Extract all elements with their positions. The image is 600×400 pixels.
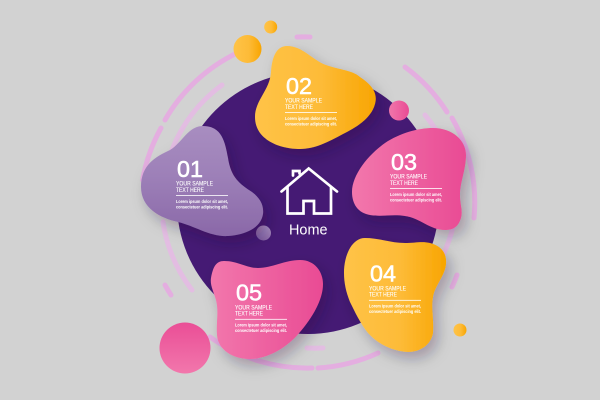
inner dashed ring — [163, 85, 453, 348]
text 04: 04 — [370, 261, 396, 287]
decorative circle: small orange right — [454, 324, 466, 336]
text 01 — [176, 156, 228, 210]
text 05: Lorem ipsum dolor sit amet, — [235, 323, 287, 328]
panel 03 — [352, 128, 466, 230]
decorative circle: large orange — [234, 35, 262, 63]
text 05 — [235, 280, 287, 333]
panel 05 — [211, 260, 323, 359]
decorative circle: small purple — [256, 226, 271, 240]
text 05: 05 — [236, 280, 262, 306]
text 01: consectetuer adipiscing elit. — [176, 204, 228, 210]
text 04: Lorem ipsum dolor sit amet, — [369, 304, 421, 309]
text 02: consectetuer adipiscing elit. — [285, 122, 337, 126]
text 01: Lorem ipsum dolor sit amet, — [176, 199, 228, 204]
text 04: consectetuer adipiscing elit. — [369, 309, 421, 314]
text 02 — [285, 73, 337, 126]
text 03 — [390, 149, 442, 202]
text 05: consectetuer adipiscing elit. — [235, 328, 287, 333]
label: Home: Home — [289, 223, 328, 239]
outer dashed ring — [143, 37, 475, 368]
decorative circle: pink — [389, 100, 409, 120]
panel 04 — [344, 238, 446, 352]
text 04 — [369, 261, 421, 314]
text 02: TEXT HERE — [285, 105, 313, 111]
panel 02 — [255, 46, 376, 149]
icon: house — [282, 168, 337, 214]
text 04: YOUR SAMPLE — [369, 286, 406, 292]
text 03: 03 — [391, 149, 417, 175]
text 02: Lorem ipsum dolor sit amet, — [285, 116, 337, 121]
text 05: TEXT HERE — [235, 312, 263, 318]
text 02: 02 — [286, 73, 312, 99]
text 03: Lorem ipsum dolor sit amet, — [390, 192, 442, 197]
text 03: consectetuer adipiscing elit. — [390, 198, 442, 202]
text 03: TEXT HERE — [390, 181, 418, 187]
text 01: 01 — [177, 156, 203, 182]
text 04: TEXT HERE — [369, 293, 397, 299]
decorative circle: small orange top — [264, 20, 277, 34]
text 01: TEXT HERE — [176, 188, 204, 194]
panel 01 — [141, 126, 263, 236]
decorative circle: large pink — [160, 322, 210, 374]
text 01: YOUR SAMPLE — [176, 182, 213, 188]
central purple circle — [177, 72, 439, 334]
text 03: YOUR SAMPLE — [390, 175, 427, 181]
text 05: YOUR SAMPLE — [235, 305, 272, 311]
text 02: YOUR SAMPLE — [285, 99, 322, 105]
